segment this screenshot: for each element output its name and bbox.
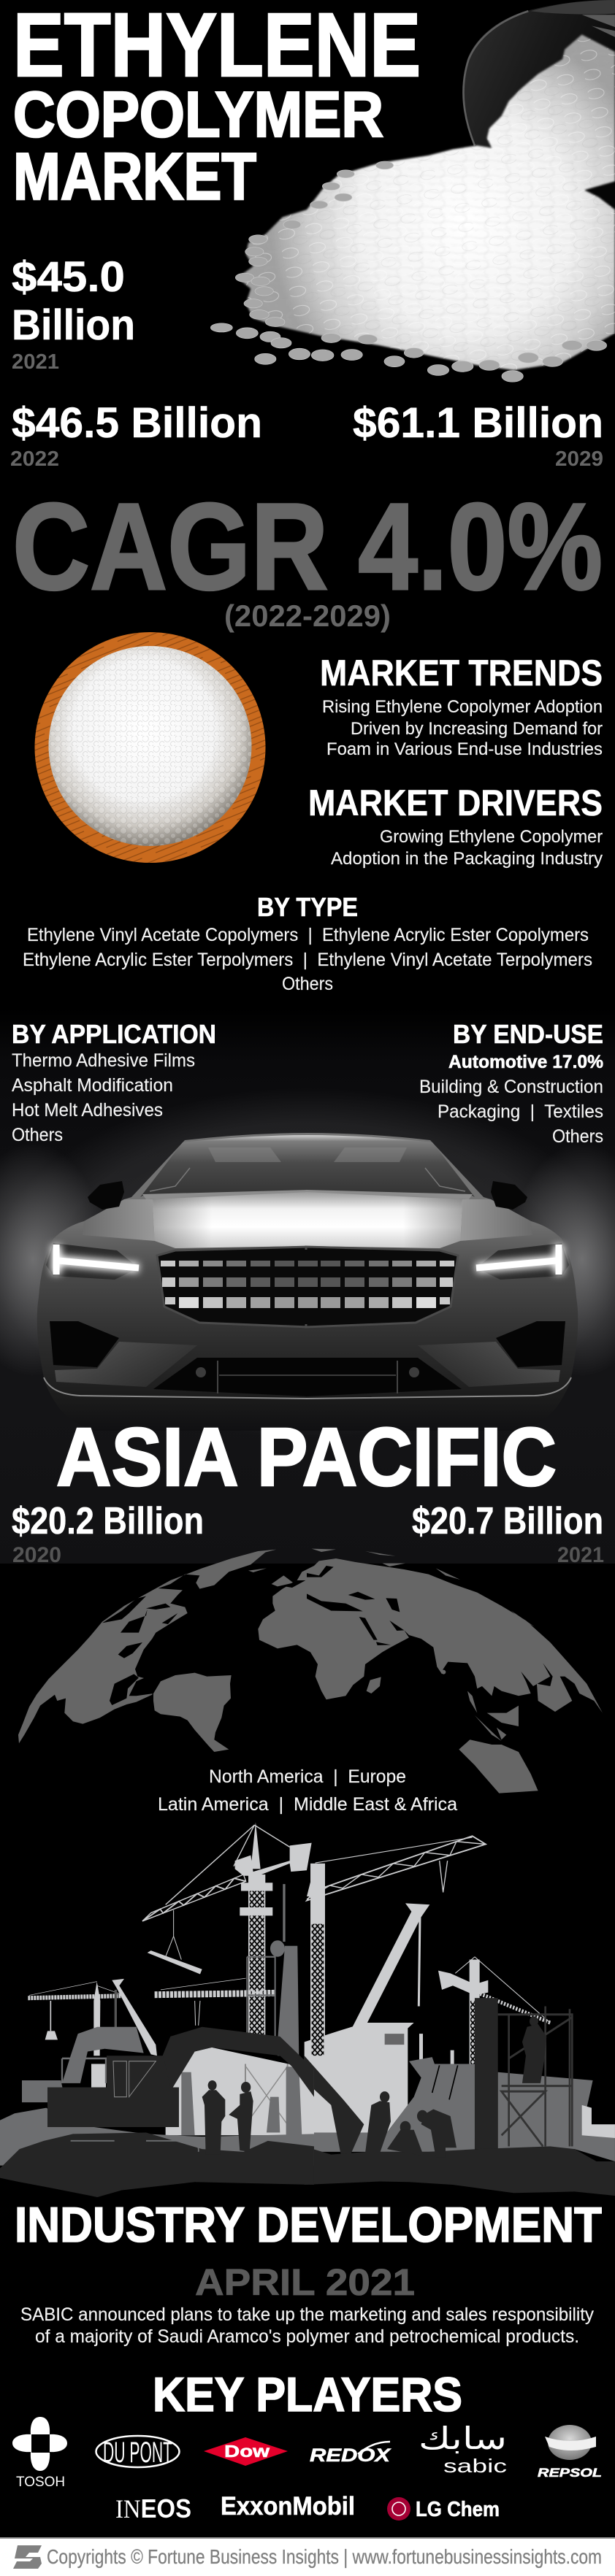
title line: MARKET: MARKET — [13, 140, 256, 214]
panel: by type — [23, 892, 592, 994]
stat: $20.2 Billion 2020 — [12, 1500, 204, 1567]
text: development description — [20, 2304, 594, 2347]
stat: $45.0 Billion 2021: 2021 — [12, 350, 59, 374]
panel: by application: Others — [12, 1125, 63, 1145]
stat: $61.1 Billion 2029: 2029 — [555, 447, 603, 471]
stat: $20.2 Billion 2020: 2020 — [12, 1543, 61, 1567]
panel: market trends: Driven by Increasing Demand for — [351, 719, 603, 739]
logo: SABIC: سابك — [419, 2421, 507, 2456]
panel: market drivers — [308, 783, 603, 869]
stat: $20.2 Billion 2020: $20.2 Billion — [12, 1500, 204, 1542]
logo: Repsol — [538, 2425, 602, 2480]
panel: by type: Ethylene Vinyl Acetate Copolymers | Ethylene Acrylic Ester Copolymers — [27, 925, 589, 945]
panel: other regions — [158, 1766, 457, 1815]
panel: by end-use: BY END-USE — [453, 1019, 603, 1049]
panel: by type: Ethylene Acrylic Ester Terpolymers | Ethylene Vinyl Acetate Terpolymers — [23, 950, 592, 970]
stat: $46.5 Billion 2022: $46.5 Billion — [12, 399, 262, 447]
stat: $20.7 Billion 2021: 2021 — [557, 1543, 604, 1567]
logo: Dow — [204, 2437, 288, 2466]
image: wooden bowl of pellets — [35, 632, 266, 863]
logo: Tosoh: TOSOH — [16, 2475, 65, 2490]
date: April 2021: APRIL 2021 — [195, 2261, 415, 2303]
logo: SABIC: sabic — [443, 2455, 507, 2477]
logo: Redox — [310, 2442, 391, 2466]
panel: by type: Others — [282, 974, 333, 994]
stat: $20.7 Billion 2021 — [412, 1500, 604, 1567]
CAGR headline: (2022-2029) — [224, 599, 391, 633]
logo: Ineos: INEOS — [115, 2494, 191, 2523]
text: development description: of a majority of Saudi Aramco's polymer and petrochemical products. — [35, 2326, 579, 2347]
logo: Tosoh — [12, 2417, 67, 2490]
stat: $45.0 Billion 2021: $45.0 — [12, 253, 125, 301]
panel: by end-use: Building & Construction — [419, 1077, 603, 1097]
logos: key players — [12, 2417, 602, 2523]
title line: COPOLYMER: COPOLYMER — [13, 78, 383, 150]
heading: Asia Pacific: ASIA PACIFIC — [56, 1411, 557, 1503]
header: title — [13, 0, 421, 214]
stat: $46.5 Billion 2022 — [10, 399, 262, 471]
panel: market trends: Rising Ethylene Copolymer Adoption — [322, 697, 603, 717]
logo: Repsol: REPSOL — [538, 2466, 602, 2480]
map: globe with continents — [18, 1549, 603, 1793]
stat: $46.5 Billion 2022: 2022 — [10, 447, 59, 471]
logo: LG Chem — [387, 2497, 500, 2521]
panel: by end-use: Others — [552, 1126, 603, 1147]
panel: market drivers: Adoption in the Packaging Industry — [331, 849, 603, 869]
stat: $61.1 Billion 2029 — [353, 399, 603, 471]
image: front of car — [37, 1133, 578, 1431]
panel: by end-use: Automotive 17.0% — [448, 1052, 603, 1072]
logo: DuPont — [96, 2436, 180, 2469]
panel: by application: Thermo Adhesive Films — [12, 1050, 195, 1071]
logo: SABIC — [419, 2421, 507, 2477]
panel: other regions: Latin America | Middle East & Africa — [158, 1794, 457, 1815]
stat: $61.1 Billion 2029: $61.1 Billion — [353, 399, 603, 447]
logo: Redox: REDOX — [310, 2445, 391, 2466]
text: development description: SABIC announced plans to take up the marketing and sales responsibility — [20, 2304, 594, 2325]
footer bar — [0, 2537, 615, 2576]
stat: $45.0 Billion 2021: Billion — [12, 301, 135, 349]
panel: by type: BY TYPE — [257, 892, 358, 922]
logo: Dow: Dow — [224, 2442, 270, 2461]
panel: by application: Hot Melt Adhesives — [12, 1100, 163, 1120]
panel: market trends — [320, 653, 603, 759]
heading: key players: KEY PLAYERS — [153, 2367, 462, 2421]
panel: market drivers: Growing Ethylene Copolymer — [380, 827, 603, 847]
panel: by application: BY APPLICATION — [12, 1019, 216, 1049]
panel: by end-use — [419, 1019, 603, 1147]
logo: DuPont: DU PONT — [103, 2437, 172, 2469]
logo: LG Chem: LG Chem — [416, 2498, 500, 2521]
icon: Fortune Business Insights mark — [13, 2545, 42, 2569]
panel: market trends: Foam in Various End-use Industries — [326, 739, 603, 759]
illustration: construction site — [0, 1822, 615, 2197]
panel: by end-use: Packaging | Textiles — [438, 1101, 603, 1122]
panel: other regions: North America | Europe — [209, 1766, 406, 1787]
panel: by application: Asphalt Modification — [12, 1075, 173, 1096]
panel: by application — [12, 1019, 216, 1145]
logo: ExxonMobil: ExxonMobil — [221, 2492, 355, 2521]
stat: $45.0 Billion 2021 — [12, 253, 135, 374]
image: jar spilling pellets — [210, 0, 615, 382]
background glow behind car — [0, 1007, 615, 1564]
